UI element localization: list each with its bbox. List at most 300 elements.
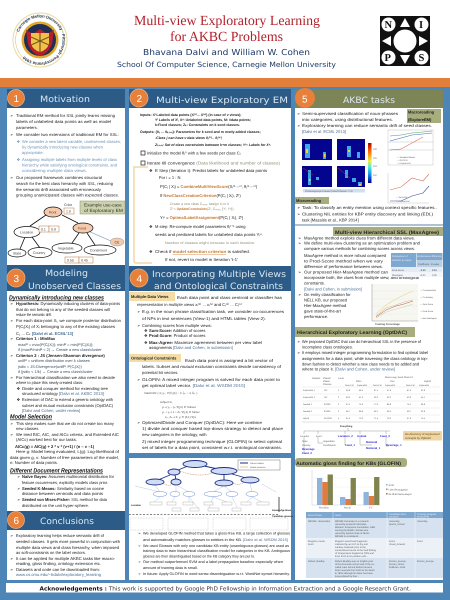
text block: conclusions: www.cs.cmu.edu/~bdalvi/exploratory_learning [16,572,102,577]
table: MaxAgree comparison: Comparison of [392,255,408,258]
diagram: example class hierarchy: Vegetable [58,246,74,250]
title [134,14,320,45]
heading: Incorporating Multiple Views and Ontological Constraints: and Ontological Constraints [154,282,283,292]
table: OptDAC results: 3 [338,410,340,413]
text block: MaxAgree: [Dalvi and Cohen, in submission] [304,286,362,292]
algorithm: EM steps: Iterate till convergence (Data likelihood and number of classes) [147,160,281,166]
algorithm: EM steps: Yᵢᵘ = OptimalLabelAssignment(P(Cⱼ | Xᵢ), Zᵗ) [160,215,244,220]
table: OptDAC results: 59.7 [407,410,412,413]
algorithm: EM steps: Create a new class Cₙₑᵥᵥ, assign Xᵢ to it [170,202,229,206]
heading: AKBC tasks: 5 [302,94,308,106]
table: OptDAC results: ExploreEM [385,384,395,387]
table: OptDAC results: Text [390,380,395,383]
text block: ontological constraints: ➢ [137,377,141,382]
diagram: example class hierarchy: State [13,252,21,256]
panel: automatic gloss finding diagram and notes [129,458,294,580]
chart: heatmaps: 20-Newsgroups Dataset (Seed Classes: 7-4) [305,190,353,193]
chart: macroreading line charts: — GLOFIN [397,159,408,162]
table: OptDAC results: 77.0 [374,403,379,406]
heading: AKBC tasks [295,88,443,108]
text block: dynamically introducing new classes: ➢ [10,318,14,323]
algorithm: inputs and outputs [140,113,271,147]
text block: motivation: grouping unanticipated classes with expected classes. [16,192,119,198]
tag: Microreading: Microreading [296,198,322,203]
text block: macroreading: into categories, using distributional features. [302,117,393,122]
heading: Multi-view Exploratory EM: Multi-view Exploratory EM [156,96,288,106]
text block: ontological constraints: get optimal label vector. [Dalvi et al. WSDM 2015] [142,383,245,388]
text block: MaxAgree: On entity classification for [304,292,351,297]
table: OptDAC results: 56.7 [346,410,351,413]
table: OptDAC results: 70.2 [359,417,364,420]
text block: MaxAgree: MaxAgree method exploits clues from different data views. [304,236,415,240]
table: gloss finding examples: of the Romantic school and of the so- [335,563,375,566]
text block: motivation: the semantic drift associated with erroneously [16,187,102,192]
text block: multiple data views: Combining scores from multiple views: [142,323,212,328]
heading: Modeling Unobserved Classes: 3 [14,274,20,285]
diagram: extended class ontology tree: Food_1 [345,443,355,447]
table: MaxAgree comparison: 0.00 [432,274,437,277]
text block: model selection [10,414,120,465]
chart: hierarchical classification performance: — Co-training [420,296,434,299]
table: gloss finding examples: MIDSIR, Universities [308,520,331,523]
diagram: example class hierarchy: Country [33,251,46,255]
heading: Motivation: 1 [14,94,20,105]
text block: macroreading [297,111,432,134]
table: MaxAgree comparison: P-value [431,263,440,266]
table: OptDAC results: #Ideal [323,380,330,383]
table: gloss finding examples: MIDSIR University is a research [335,520,370,523]
text block: ontological constraints [137,358,284,450]
diagram: example class hierarchy: Condiment [90,248,107,252]
chart: hierarchical classification performance [372,284,437,326]
table: gloss finding examples: conventional course of the food fishing [335,549,376,552]
text block: motivation: parameters. [16,125,38,130]
text block: motivation: ➢ [10,175,14,180]
table: gloss finding examples: Food [417,540,423,543]
callout: example use-case [80,201,125,214]
text block: different document representations [10,468,115,508]
diagram: extended class ontology tree: Everything [340,425,353,428]
table: gloss finding examples: Person_Europe [417,560,434,563]
chart: macroreading line charts: — Explore-EM [396,200,410,203]
table: OptDAC results: 68.4 [359,389,364,392]
text block: GLOFIN notes: ➢ [138,532,141,536]
table: OptDAC results: ExploreEM [357,384,367,387]
table: MaxAgree comparison: Performance difference [417,255,442,258]
text block: conclusions: Exploratory learning helps reduce semantic drift of [16,533,105,538]
chart: hierarchical classification performance: — Prod-Score [420,310,434,313]
text block: ontological constraints: ζⱼₖ, δⱼₖ ≥ 0, yⱼ ∈ {0,1} ∀j,k [165,415,197,419]
text block: model selection: Model Selection [10,414,52,420]
text block: model selection: data given g, v: Number of free parameters of the model, [10,455,119,460]
text block: motivation: appropriate. [22,150,44,155]
text block: MaxAgree [298,236,421,319]
tag: Microreading [295,197,329,204]
text block: GLOFIN notes: Our method outperformed SVM and a label propagation baseline especially when [143,560,283,564]
text block: ontological constraints: set of labels for a data point, consistent w.r.t. ontological constraints. [142,445,282,450]
table: OptDAC results: 3 [338,403,340,406]
text block: ontological constraints: labels. Subset and mutual exclusion constraints decide consistency of [142,364,282,369]
text block: macroreading: Exploratory learning can reduce semantic drift of seed classes. [302,123,432,128]
text block: dynamically introducing new classes: For each data-point Xᵢ, we compute posterior distribution [16,318,122,323]
text block: different document representations: Seeded von Mises-Fisher: SSL method for data [22,497,108,502]
text block: OptDAC: ➢ [297,339,301,344]
header: NIPS logo [380,16,430,66]
text block: multiple data views: representation in multiple views xᵢ⁽¹⁾ ... xᵢ⁽ᵛ⁾ and Cⱼ⁽¹⁾ ... Cⱼ⁽ᵛ⁾ [137,302,242,307]
text block: model selection: n: Number of data points. [10,460,58,465]
text block: ontological constraints: OptimizedDivide and Conquer (OptDAC): Here we combine [142,420,263,425]
table: MaxAgree comparison: 0.01 [432,269,437,272]
text block: model selection: We tried BIC, AIC, and AICc criteria, and Extended AIC [16,432,119,437]
diagram: NELL ontology with glosses: Knowledge Base [272,509,292,512]
text block: motivation: Our proposed framework combines structural [16,175,102,180]
text block: GLOFIN notes: training data to train hierarchical classification model for categories in the KB. Ambiguous [143,549,290,553]
legend: ontology relations [238,460,280,470]
arrow: iteration loop [134,167,152,263]
table: OptDAC results: 58.1 [374,410,379,413]
table: gloss finding examples: University, [389,520,400,523]
diagram: example class hierarchy: CE [114,240,120,244]
text block: OptDAC: It employs mixed integer programming formulation to find optimal label [302,350,428,355]
table: OptDAC results: #Seed/ [323,377,331,380]
chart: macroreading line charts [388,130,433,203]
heading: Multi-view Exploratory EM: 2 [136,94,142,105]
table: OptDAC results: 197 [324,389,328,392]
diagram: example class hierarchy: Root [49,210,56,214]
table: OptDAC results: ExploreEM 2 [303,396,316,399]
text block: dynamically introducing new classes: Divide and conquer method for extending tree [22,386,109,391]
table: OptDAC results: Macro-avg. Seed Class F1 [385,376,414,379]
table: gloss finding examples: serving the British colonial area [335,529,369,532]
text block: ontological constraints: potential bit vectors. [142,370,178,375]
text block: dynamically introducing new classes: ❖ [16,397,20,402]
text block: model selection: ➢ [10,432,14,437]
text block: GLOFIN notes: ➢ [138,572,141,576]
table: OptDAC results: Seeded 2 [303,410,313,413]
diagram: example class hierarchy: Coke [64,203,72,207]
text block: MaxAgree: ➢ [298,240,302,246]
table: OptDAC results: 69.4 [387,410,392,413]
text block: GLOFIN notes [138,532,290,576]
text block: MaxAgree: We define multi-view clustering as an optimization problem and [304,240,421,246]
table: OptDAC results: 2 [338,396,340,399]
heading: Modeling Unobserved Classes [7,265,125,292]
diagram: extended class ontology tree: Vegetables [323,440,336,443]
table: gloss finding examples: concepts [389,516,399,518]
table: MaxAgree comparison: MaxAgree [392,274,404,277]
diagram: extended class ontology tree [300,425,402,455]
text block: ontological constraints: maximize ( Σⱼ yⱼ · P(Cⱼ|xᵢ) − Σ ζⱼₖ − Σ δⱼₖ ) [144,391,197,395]
algorithm: EM steps: ❖ [149,249,153,254]
diagram: example class hierarchy [8,203,124,263]
algorithm: EM steps: ❖ [149,224,153,229]
heading: Hierarchical Exploratory Learning [295,327,415,337]
diagram: extended class ontology tree: Beverage [302,447,315,451]
table: OptDAC results: Classes [323,383,332,386]
header: NIPS logo: S [418,53,424,64]
diagram: extended class ontology tree: Condiments [323,444,337,447]
text block: conclusions: It can be applied for multiple AKBC tasks like macro- [16,556,116,561]
text block: motivation: ❖ [16,139,20,144]
text block: dynamically introducing new classes: P(Cⱼ|Xᵢ) of Xᵢ belonging to any of the existing classes [16,324,115,329]
panel: multi-view exploratory EM and constraints column [129,89,291,453]
text block: GLOFIN notes: ➢ [138,544,141,548]
text block: dynamically introducing new classes: ➢ [10,375,14,380]
heading: Conclusions [7,511,125,530]
text block: different document representations: Seeded K-Means: Similarity based on cosine [22,486,105,491]
text block: OptDAC: down fashion to detect whether a new class needs to be added and [302,362,420,366]
table: gloss finding examples: Kingston wood food fragments [335,540,368,543]
table: OptDAC results: Dataset [312,377,321,380]
text block: different document representations: distance between centroids and data points [22,491,103,496]
title: Multi-view Exploratory Learning [134,14,320,29]
text block: ontological constraints: GLOFIN: A mixed integer program is solved for each data point to [142,377,281,382]
table: gloss finding examples: Concept assigned [417,513,437,516]
bar chart: precision, recall, F1 [312,470,380,510]
table: OptDAC results: 67.5 [407,417,412,420]
table: gloss finding examples: collected by an ELO to dry and [335,543,368,546]
table: gloss finding examples: Gloss [335,514,342,517]
legend: gloss finding methods: GLOFIN-Naive-Bayes [388,493,413,496]
algorithm: inputs and outputs: Outputs: {θ₁ ... θₖ₊ₘ}: Parameters for k seed and m newly added classes; [140,130,261,134]
text block: dynamically introducing new classes: Criterion 2 : JS (Jensen-Shannon divergence) [16,353,105,358]
text block: different document representations: Different Document Representations [10,468,104,474]
diagram: example class hierarchy: 0.45 [81,258,88,262]
tag: Multiple-Data Views [129,292,175,301]
algorithm: inputs and outputs: Inputs: Xˡ Labeled data points {X⁽¹⁾... X⁽ᵛ⁾} (in case of v views); [140,113,241,117]
table: gloss finding examples: in 1843 although his fame has been [335,572,374,575]
callout: extended ontology: Re-discovery of suppressed [405,432,440,436]
acknowledgements bar [6,583,443,592]
text block: dynamically introducing new classes: reduce the semantic drift. [16,312,52,317]
text block: MaxAgree: to Prod-Score method when we vary [304,258,384,264]
panel: motivation, modeling and conclusions column [7,89,125,580]
diagram: NELL ontology with glosses: Candidate glosses [272,515,294,518]
heading: Incorporating Multiple Views and Ontological Constraints: Incorporating Multiple Views [152,270,286,280]
table: MaxAgree comparison: -0.39 [420,269,426,272]
text block: MaxAgree: incorporate both, the clues from multiple view, and ontological [304,275,419,280]
table: OptDAC results: 53.0 [407,396,412,399]
text block: different document representations: feature occurrences, explicitly models class prior. [22,480,108,485]
table: OptDAC results: 87.6 [407,389,412,392]
text block: multiple data views: Each data point and class centroid or classifier has [177,295,282,300]
table: gloss finding examples: Robert Bradley was an English poet [335,560,373,563]
text block: ontological constraints: new categories in the ontology, with [142,432,207,437]
chart: macroreading line charts: — Semi-EM [396,196,407,199]
text block: GLOFIN notes: ➢ [138,560,141,564]
text block: multiple data views: ❖ [144,333,148,338]
legend: gloss finding methods [386,484,413,496]
table: OptDAC results: 8/1200 [324,410,331,413]
algorithm: EM steps: Check if model selection criterion is satisfied. [155,249,250,254]
table: gloss finding examples: Western Tennessee Foundation, 1881 [335,526,376,529]
text block: macroreading: [Dalvi et al. ECML 2013] [302,129,346,134]
text block: GLOFIN notes: We used Glosses with only one candidate KB entity (unambiguous glosses) are used as [143,544,289,548]
algorithm: EM steps: If NewClassCreationCriterion(P(Cⱼ | Xᵢ), Zᵗ) [160,193,241,198]
table: gloss finding examples: by GLOFIN [417,516,429,518]
text block: motivation: Assigning multiple labels from multiple levels of class [22,157,117,162]
tag: Macroreading [407,109,441,123]
table: OptDAC results: Hybrid [424,380,432,383]
text block: dynamically introducing new classes: Criterion 1 : MinMax [16,336,56,341]
text block: motivation: Traditional EM method for SSL jointly learns missing [16,113,116,118]
text block: dynamically introducing new classes: maxP = max(P(Cⱼ|Xᵢ)); minP = min(P(Cⱼ|Xᵢ)); [18,342,93,347]
text block: multiple data views: ❖ [144,340,148,345]
text block: macroreading: ➢ [297,123,301,128]
table: gloss finding examples: food, fresh in its position until… [335,555,369,558]
text block: dynamically introducing new classes: [Dalvi and Cohen, under review] [22,408,80,413]
table: OptDAC results: Level [338,377,344,380]
text block: motivation: hierarchy while satisfying ontological constraints, and [22,162,118,168]
authors and affiliation: Bhavana Dalvi and William W. Cohen [143,47,310,57]
text block: multiple data views: of NPs in text sentences (View-1) and HTML tables (View-2). [142,316,266,321]
text block: conclusions: reading, gloss finding, ontology extension etc. [16,561,101,566]
chart: macroreading line charts: — Explore-EM [397,162,411,165]
text block: MaxAgree: Hier-MaxAgree method [304,303,347,308]
table: OptDAC results: 4 [338,417,340,420]
authors and affiliation [117,47,337,69]
text block: multiple data views [137,295,284,350]
chart: hierarchical classification performance: Training Percentage [375,323,400,326]
text block: MaxAgree: ➢ [298,292,302,297]
table: gloss finding examples: Poet Laureate from 1813 to his death [335,569,375,572]
heading: Conclusions: Conclusions [40,517,94,527]
table: OptDAC results: 71.5 [374,417,379,420]
text block: conclusions: ➢ [10,567,14,572]
table: OptDAC results: 2 [338,389,340,392]
text block: dynamically introducing new classes: jsdiv = JS-Divergence(unifP, P(Cⱼ|Xᵢ)) [17,364,82,369]
chart: hierarchical classification performance: — Sum-Score [420,303,434,306]
table: OptDAC results: 87.4 [374,389,379,392]
table: OptDAC results: 51.3 [359,396,364,399]
chart: heatmaps: 0.4 [373,165,377,168]
diagram: NELL ontology with glosses: Location [131,504,142,507]
panel: AKBC tasks column [295,88,443,580]
diagram: example class hierarchy: Location [20,230,33,234]
table: OptDAC results: 57.6 [387,389,392,392]
table: gloss finding examples: called Lake School Robert became [335,566,373,569]
text block: dynamically introducing new classes: For hierarchical classification we also need to decide [16,375,116,380]
table: OptDAC results: Seeded 1 [303,403,313,406]
text block: dynamically introducing new classes: ➢ [10,301,14,306]
text block: dynamically introducing new classes: ➢ [10,353,14,358]
legend: ontology relations: Mutual exclusion [250,466,266,469]
text block: different document representations: ➢ [17,474,21,479]
text block: microreading: ➢ [297,205,301,210]
table: OptDAC results: 61.5 [346,417,351,420]
table: OptDAC results: 24/1200 [324,417,332,420]
chart: macroreading line charts: — Seeded-KMeans [397,156,415,159]
table: OptDAC results: ExploreEM [419,384,429,387]
diagram: extended class ontology tree: Animal [357,434,367,438]
table: MaxAgree comparison: Prod-Score [392,269,405,272]
table: OptDAC results: 75.4 [421,417,426,420]
algorithm: EM steps: M step: Re-compute model parameters θⱼᵗ⁺¹ using [155,224,246,229]
algorithm: inputs and outputs: Yˡ Labels of Xˡ, Xᵘ: Unlabeled data points, M: #data points; [155,118,251,122]
text block: motivation: ➢ [10,132,14,137]
text block: GLOFIN notes: glosses are then disambiguated based on the KB category they are put to. [143,554,255,558]
heading: Motivation [7,89,125,108]
diagram: extended class ontology tree: Beverage_1 [386,443,402,447]
bar chart: precision, recall, F1: F1 [369,506,372,510]
table: gloss finding examples: Food, [389,540,395,543]
callout: example use-case: Example use-case [84,202,122,208]
chart: hierarchical classification performance: — Concatenation [420,289,437,292]
bar chart: precision, recall, F1: Recall [344,506,351,510]
algorithm: EM steps: seeds and predicted labels for unlabeled data points Yᵢᵘ. [155,232,263,237]
table: MaxAgree comparison [391,253,442,277]
text block: multiple data views: Sum-Score: Addition of scores [149,328,205,333]
algorithm: EM steps: Initialize the model θⱼ⁰ with a few seeds per class Cⱼ [147,150,241,156]
table: OptDAC results: NELL [356,380,363,383]
heading: Hierarchical Exploratory Learning: Hierarchical Exploratory Learning (OptDAC) [297,330,407,336]
algorithm: EM steps: For i = 1 : N [159,175,181,180]
header: NIPS logo: I [419,20,423,31]
text block: model selection: ➢ [10,421,14,426]
text block: conclusions: multiple data views and class hierarchy, when imposed [16,545,120,550]
table: gloss finding examples: Noun Phrase [308,514,323,517]
text block: conclusions [10,533,121,577]
table: gloss finding examples: university located in Memphis, [335,523,367,526]
diagram: extended class ontology tree: Location_2 [338,434,353,438]
table: gloss finding examples: MIDSIR is considered… [335,535,361,538]
algorithm: EM steps: Zᵗ = UpdateConstraints(Zᵗ, Cₙₑᵥᵥ, {Yˡ, Yᵘ}) [170,207,234,211]
algorithm: EM steps [141,150,281,262]
text block: dynamically introducing new classes: ➢ [10,336,14,341]
text block: dynamically introducing new classes: C₁ ... Cₖ [Dalvi et al. ECML'13] [16,331,74,336]
text block: motivation: by dynamically introducing new classes when [22,144,104,150]
text block: dynamically introducing new classes: Hypothesis: Dynamically inducing clusters of data-points [16,301,120,306]
table: OptDAC results: 50.8 [346,389,351,392]
text block: MaxAgree: Our proposed Hier-MaxAgree method can [304,270,389,274]
tag: Multiple-Data Views: Multiple-Data Views [131,294,169,299]
text block: motivation: We consider two extensions of traditional EM for SSL: [16,132,119,137]
table: gloss finding examples: Robert, Bradley [308,560,325,563]
table: OptDAC results: Semi-EM [373,384,382,387]
heading: Incorporating Multiple Views and Ontological Constraints [129,266,291,292]
text block: model selection: (AICc) worked best for our tasks. [16,437,77,442]
table: OptDAC results: 57.4 [346,403,351,406]
table: gloss finding examples: university System state of Norris [335,532,370,535]
tag: Macroreading: Macroreading [408,110,435,114]
heading: Automatic gloss finding [295,458,407,467]
heading: Automatic gloss finding: Automatic gloss finding for KBs (GLOFIN) [296,461,401,467]
chart: hierarchical classification performance: — Hier-MaxAgree [420,317,437,320]
table: gloss finding examples: Person_Europe, [389,560,407,563]
text block: different document representations: distributed on the unit hyper-sphere. [22,503,89,508]
text block: dynamically introducing new classes [9,294,122,413]
table: OptDAC results: 89.8 [421,403,426,406]
text block: MaxAgree: performance. [304,314,328,319]
table: OptDAC results: 50.2 [374,396,379,399]
diagram: extended class ontology tree: State [302,440,308,443]
text block: MaxAgree: MaxAgree method is more robust compared [304,253,387,258]
tag: Macroreading: (ExploreEM) [408,117,432,122]
text block: MaxAgree: NELL KB, our proposed [304,298,348,302]
diagram: extended class ontology tree: Food_2 [302,451,312,455]
text block: different document representations: ➢ [17,486,21,491]
text block: conclusions: ➢ [10,556,14,561]
tag: Ontological Constraints: Ontological Constraints [131,356,177,360]
table: MaxAgree comparison: methods (p-value) [392,259,411,262]
table: OptDAC results: Semi-EM [406,384,415,387]
text block: OptDAC [297,339,429,372]
header: NIPS logo: N [384,20,392,31]
table: gloss finding examples: Food [308,543,314,546]
text block: dynamically introducing new classes: where to place this newly created class: [16,380,83,385]
text block: GLOFIN notes: We developed GLOFIN method that takes a gloss-free KB, a large collection of glosses [143,532,290,536]
diagram: extended class ontology tree: Location [300,435,310,438]
